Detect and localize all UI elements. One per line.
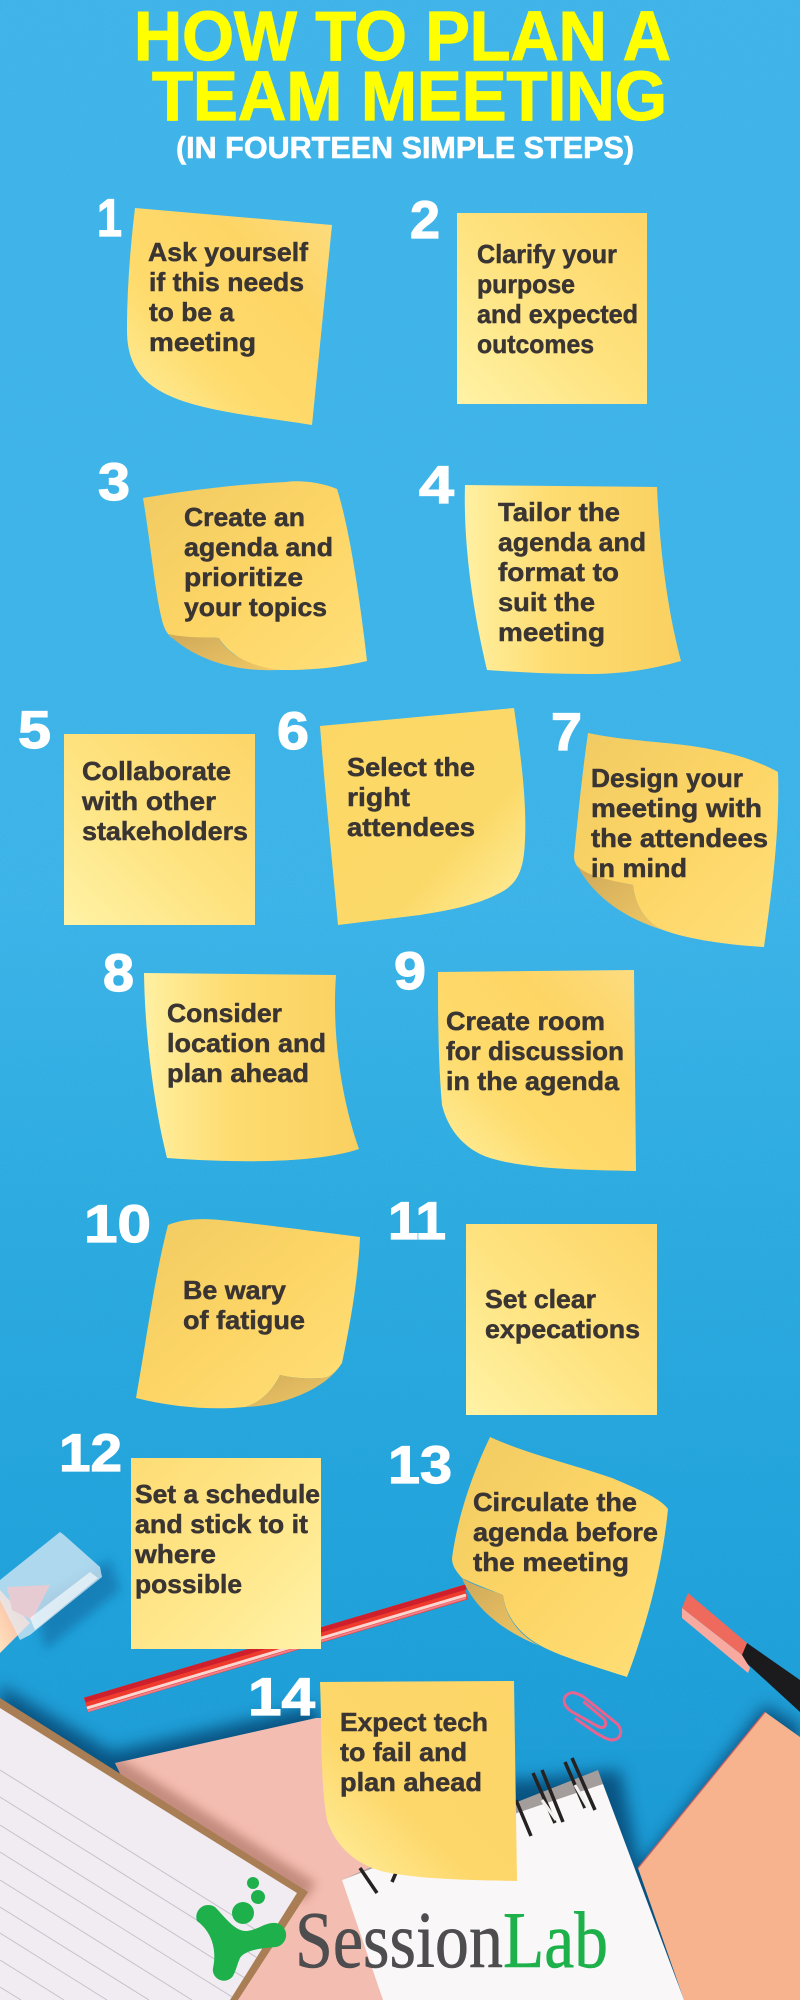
pen right	[682, 1593, 800, 1712]
notebook left	[0, 1698, 320, 2000]
red pencil	[85, 1587, 466, 1711]
step 10: Be wary	[183, 1275, 287, 1305]
step 5: 5	[18, 701, 51, 760]
step 7: meeting with	[591, 793, 762, 823]
step 1: meeting	[149, 327, 256, 357]
step 13: Circulate the	[473, 1487, 637, 1517]
step 1: to be a	[149, 297, 235, 327]
subtitle: (IN FOURTEEN SIMPLE STEPS)	[176, 130, 634, 165]
pink folder	[110, 1718, 400, 2000]
orange folder	[638, 1712, 800, 2000]
step 12: where	[134, 1539, 216, 1569]
step 9: Create room	[446, 1006, 605, 1036]
step 7: Design your	[591, 763, 743, 793]
step 3: Create an	[184, 502, 305, 532]
step 14: to fail and	[340, 1737, 467, 1767]
marker left	[0, 1532, 102, 1653]
step 14: plan ahead	[340, 1767, 482, 1797]
logo wordmark: SessionLab	[295, 1897, 608, 1985]
step 2: and expected	[477, 299, 638, 329]
step 12	[59, 1424, 321, 1649]
spiral notepad	[342, 1758, 684, 2000]
step 2: outcomes	[477, 329, 594, 359]
step 3: agenda and	[184, 532, 333, 562]
step 11: Set clear	[485, 1284, 596, 1314]
desk objects illustration	[0, 1532, 800, 2000]
paper clip	[564, 1693, 621, 1740]
step 3	[98, 453, 367, 670]
step 8: 8	[103, 944, 134, 1003]
step 1: Ask yourself	[148, 237, 308, 267]
step 1	[97, 189, 332, 425]
title: TEAM MEETING	[152, 57, 667, 135]
step 5	[18, 701, 255, 925]
step 11: expecations	[485, 1314, 640, 1344]
step 7	[551, 703, 778, 947]
step 4: format to	[498, 557, 619, 587]
step 9: in the agenda	[446, 1066, 620, 1096]
step 9: 9	[394, 942, 426, 1001]
step 8	[103, 944, 359, 1161]
step 12: and stick to it	[135, 1509, 308, 1539]
step 6: attendees	[347, 812, 475, 842]
step 11	[388, 1192, 657, 1415]
step 9	[394, 942, 636, 1171]
step 10: 10	[84, 1195, 151, 1254]
step 2: Clarify your	[477, 239, 617, 269]
step 12: Set a schedule	[135, 1479, 320, 1509]
step 4: meeting	[498, 617, 605, 647]
step 14: 14	[248, 1668, 316, 1727]
step 4: agenda and	[498, 527, 646, 557]
step 3: prioritize	[184, 562, 303, 592]
step 6: 6	[277, 702, 309, 761]
step 1: 1	[97, 189, 122, 248]
step 3: your topics	[184, 592, 327, 622]
step 4: 4	[419, 456, 455, 515]
step 14	[248, 1668, 517, 1881]
step 7: in mind	[591, 853, 687, 883]
step 6: right	[347, 782, 410, 812]
step 6	[277, 702, 525, 925]
step 4	[419, 456, 681, 674]
SessionLab logo	[196, 1877, 608, 1985]
title	[134, 0, 671, 135]
step 13: the meeting	[473, 1547, 629, 1577]
step 13	[388, 1436, 668, 1677]
step 7: 7	[551, 703, 582, 762]
step 5: Collaborate	[82, 756, 231, 786]
step 8: location and	[167, 1028, 326, 1058]
icon: green figure	[196, 1877, 286, 1981]
step 12: possible	[135, 1569, 242, 1599]
step 12: 12	[59, 1424, 122, 1483]
step 7: the attendees	[591, 823, 768, 853]
step 13: 13	[388, 1436, 452, 1495]
step 5: stakeholders	[82, 816, 248, 846]
step 5: with other	[81, 786, 216, 816]
step 11: 11	[388, 1192, 446, 1251]
step 1: if this needs	[149, 267, 304, 297]
step 9: for discussion	[446, 1036, 624, 1066]
step 4: suit the	[498, 587, 595, 617]
step 8: Consider	[167, 998, 282, 1028]
step 13: agenda before	[473, 1517, 658, 1547]
step 8: plan ahead	[167, 1058, 309, 1088]
step 4: Tailor the	[498, 497, 620, 527]
step 6: Select the	[347, 752, 475, 782]
step 3: 3	[98, 453, 130, 512]
step 2	[410, 191, 647, 404]
step 10: of fatigue	[183, 1305, 305, 1335]
step 2: purpose	[477, 269, 575, 299]
step 10	[84, 1195, 360, 1408]
step 2: 2	[410, 191, 440, 250]
step 14: Expect tech	[340, 1707, 488, 1737]
